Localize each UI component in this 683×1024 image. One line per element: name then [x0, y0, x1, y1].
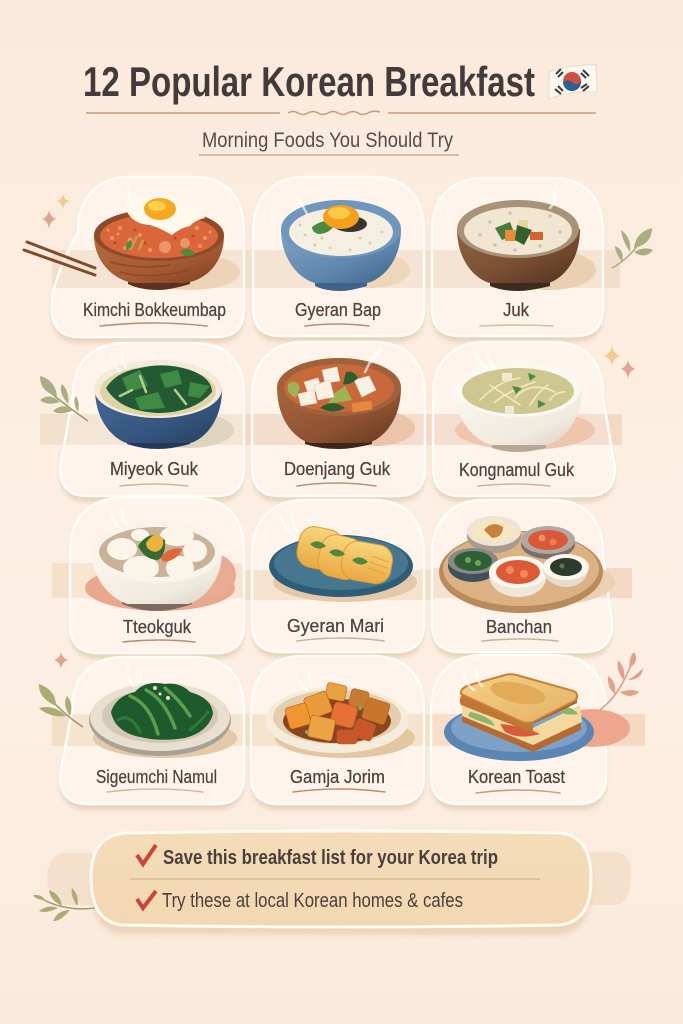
card [60, 657, 244, 804]
icon: leaf sprig top right [612, 228, 653, 268]
footer divider [130, 878, 540, 880]
icon: seaweed soup bowl [94, 352, 234, 449]
icon: Korean flag [549, 65, 597, 99]
card [431, 655, 606, 804]
card drop shadows [52, 183, 615, 810]
card [60, 343, 244, 496]
dish: greens [448, 548, 498, 582]
underline [120, 484, 188, 486]
dish: white radish kimchi [489, 556, 547, 597]
label: Juk [503, 300, 530, 320]
icon: kimchi fried rice bowl [94, 186, 240, 290]
panel: Gyeran Mari [252, 500, 424, 652]
icon: egg rice bowl [281, 196, 410, 291]
panel: Juk [432, 178, 603, 336]
label: Kimchi Bokkeumbap [83, 300, 226, 320]
underline [480, 325, 553, 326]
label: Sigeumchi Namul [96, 767, 217, 787]
label: Banchan [486, 617, 552, 637]
panel: Banchan [432, 500, 615, 652]
icon: leaf sprig footer [33, 888, 95, 921]
card [432, 500, 612, 652]
underline [293, 789, 385, 792]
label: Kongnamul Guk [459, 460, 575, 480]
underline [305, 324, 369, 326]
panel: Kimchi Bokkeumbap [52, 177, 244, 337]
icon: leaf sprig row two left [40, 376, 88, 421]
underline [100, 323, 207, 326]
underline [476, 790, 560, 793]
panel: Miyeok Guk [60, 343, 244, 496]
underline [482, 639, 558, 641]
title divider [86, 111, 596, 114]
card [70, 498, 244, 653]
subtitle underline [199, 154, 459, 156]
card [252, 500, 424, 652]
icon: leaf sprig row four right [600, 652, 643, 710]
panel: Gamja Jorim [251, 656, 424, 804]
background bands [40, 250, 645, 746]
icon: side dishes on tray [439, 516, 615, 613]
check mark [137, 845, 156, 864]
panel: Sigeumchi Namul [60, 657, 244, 804]
icon: spinach plate [89, 668, 237, 758]
card [432, 178, 603, 336]
icon: toast sandwich plate [444, 668, 630, 761]
underline [107, 789, 203, 792]
label: Gyeran Bap [295, 300, 381, 320]
subtitle: Morning Foods You Should Try [202, 129, 453, 152]
underline [478, 484, 550, 486]
icon: leaf sprig row four left [39, 684, 83, 727]
card [52, 177, 244, 337]
check mark [137, 891, 156, 908]
dish: sauce [467, 516, 521, 553]
card [253, 177, 424, 336]
panel: Tteokguk [70, 498, 244, 653]
card [251, 656, 424, 804]
card [252, 342, 425, 496]
icon: doenjang stew bowl [277, 350, 415, 449]
dish: seaweed [543, 554, 589, 587]
dish: kimchi [521, 526, 575, 559]
panel: Gyeran Bap [253, 177, 424, 336]
label: Miyeok Guk [110, 459, 199, 479]
icon: sparkles row two right [604, 346, 635, 379]
footer card [91, 831, 591, 927]
card base fills [52, 177, 615, 804]
icon: chopsticks [24, 242, 95, 275]
underline [297, 638, 384, 641]
icon: porridge bowl [457, 190, 596, 291]
card [433, 342, 615, 496]
icon: braised potatoes plate [265, 672, 415, 758]
title: 12 Popular Korean Breakfast [83, 58, 535, 105]
tip one: Save this breakfast list for your Korea trip [163, 847, 498, 869]
tip two: Try these at local Korean homes & cafes [162, 890, 463, 912]
panel: Kongnamul Guk [433, 342, 615, 496]
label: Korean Toast [468, 767, 565, 787]
icon: sparkle row four left [54, 652, 68, 669]
icon: rice cake soup bowl [85, 510, 236, 611]
icon: rolled omelette plate [269, 514, 417, 602]
label: Gyeran Mari [287, 616, 384, 636]
panel: footer tips [91, 831, 592, 935]
footer background blob [47, 852, 631, 905]
underline [297, 483, 376, 486]
icon: bean sprout soup bowl [455, 352, 595, 452]
label: Tteokguk [123, 617, 192, 637]
label: Gamja Jorim [290, 767, 385, 787]
underline [123, 640, 195, 642]
icon: sparkles top left [42, 194, 69, 229]
panel: Korean Toast [431, 655, 630, 804]
label: Doenjang Guk [284, 459, 391, 479]
panel: Doenjang Guk [252, 342, 425, 496]
